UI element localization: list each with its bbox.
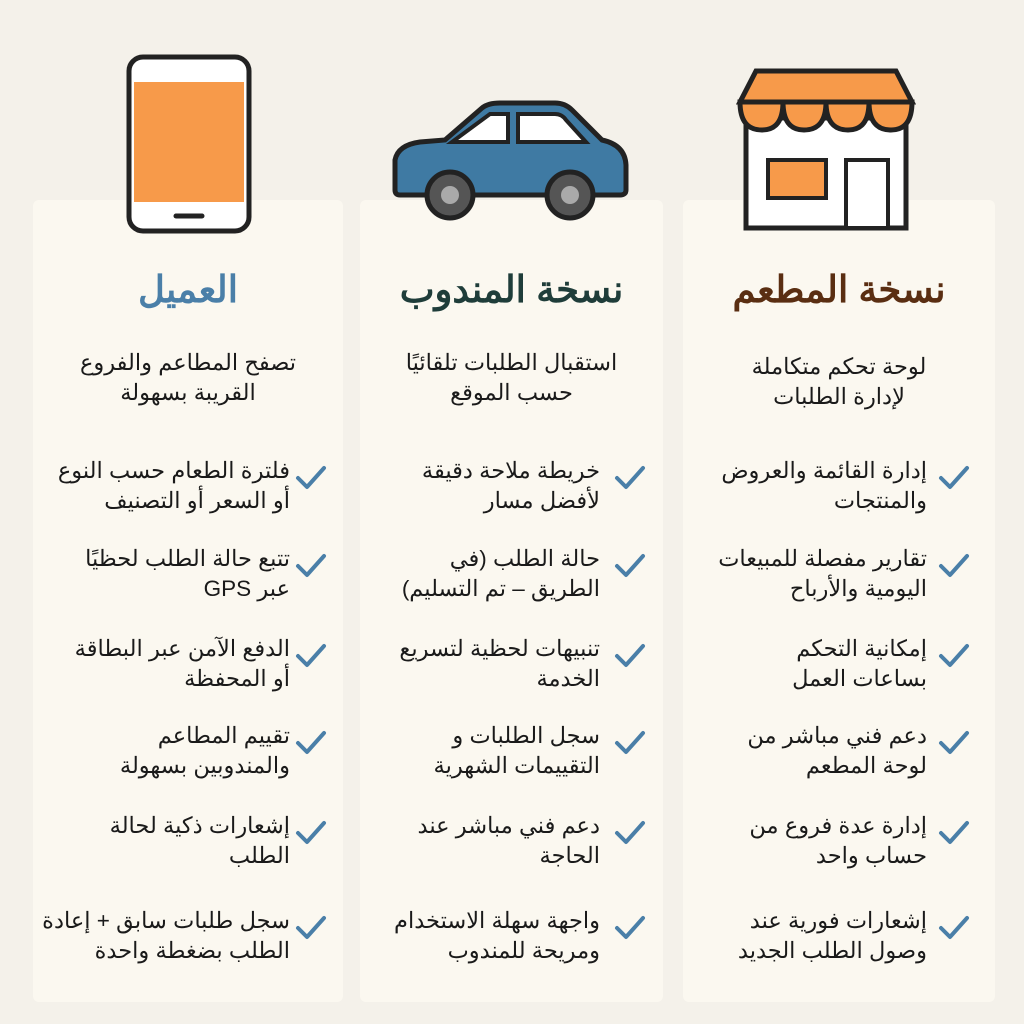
list: driver: لأفضل مسار — [484, 488, 600, 513]
subtitle: restaurant: لوحة تحكم متكاملة — [752, 354, 926, 379]
subtitle: restaurant: لإدارة الطلبات — [773, 384, 905, 409]
title: customer: العميل — [138, 269, 238, 310]
list: restaurant: بساعات العمل — [792, 666, 927, 691]
list: driver: الحاجة — [540, 843, 600, 868]
list: restaurant: إدارة القائمة والعروض — [721, 458, 927, 483]
list: restaurant — [718, 458, 927, 964]
list: restaurant: لوحة المطعم — [806, 753, 927, 778]
list: customer: الدفع الآمن عبر البطاقة — [75, 636, 290, 661]
list: customer: إشعارات ذكية لحالة — [110, 813, 290, 838]
list: customer — [42, 458, 290, 964]
list: driver: التقييمات الشهرية — [434, 753, 600, 778]
list: driver: حالة الطلب (في — [450, 546, 600, 571]
icon: store — [736, 68, 916, 230]
list: driver: الخدمة — [536, 666, 600, 691]
title: driver: نسخة المندوب — [400, 269, 623, 310]
subtitle: customer: تصفح المطاعم والفروع — [80, 350, 296, 375]
list: restaurant: إمكانية التحكم — [796, 636, 927, 661]
list: customer: الطلب بضغطة واحدة — [95, 938, 290, 963]
panel: restaurant — [683, 200, 995, 1002]
panel: customer — [33, 200, 343, 1002]
list: driver: الطريق – تم التسليم) — [402, 576, 600, 601]
list: customer: والمندوبين بسهولة — [120, 753, 290, 778]
list: restaurant: اليومية والأرباح — [790, 576, 927, 601]
panel: driver — [360, 200, 663, 1002]
list: customer: تتبع حالة الطلب لحظيًا — [85, 546, 290, 571]
subtitle: driver: حسب الموقع — [450, 380, 573, 405]
list: restaurant: دعم فني مباشر من — [747, 723, 927, 748]
list: customer: سجل طلبات سابق + إعادة — [42, 908, 290, 933]
subtitle: customer: القريبة بسهولة — [120, 380, 256, 405]
list: customer: أو المحفظة — [184, 666, 290, 691]
subtitle: driver: استقبال الطلبات تلقائيًا — [406, 350, 617, 375]
list: customer: الطلب — [229, 843, 290, 868]
list: driver — [394, 458, 600, 964]
list: driver: دعم فني مباشر عند — [418, 813, 600, 838]
list: driver: سجل الطلبات و — [452, 723, 600, 748]
list: driver: تنبيهات لحظية لتسريع — [399, 636, 600, 661]
list: restaurant: وصول الطلب الجديد — [738, 938, 927, 963]
list: restaurant: تقارير مفصلة للمبيعات — [718, 546, 927, 571]
list: customer: أو السعر أو التصنيف — [104, 488, 290, 513]
subtitle: customer — [80, 350, 296, 406]
list: restaurant: والمنتجات — [834, 488, 927, 513]
list: restaurant: حساب واحد — [816, 843, 927, 868]
list: driver: خريطة ملاحة دقيقة — [422, 458, 600, 483]
list: restaurant: إدارة عدة فروع من — [749, 813, 927, 838]
list: driver: ومريحة للمندوب — [448, 938, 600, 963]
list: driver: واجهة سهلة الاستخدام — [394, 908, 600, 933]
title: restaurant: نسخة المطعم — [732, 269, 946, 310]
icon: phone — [126, 54, 252, 234]
subtitle: restaurant — [752, 354, 926, 410]
subtitle: driver — [406, 350, 617, 406]
list: customer: عبر GPS — [204, 576, 290, 601]
icon: car — [392, 100, 628, 220]
list: restaurant: إشعارات فورية عند — [750, 908, 927, 933]
list: customer: فلترة الطعام حسب النوع — [58, 458, 290, 483]
list: customer: تقييم المطاعم — [158, 723, 290, 748]
